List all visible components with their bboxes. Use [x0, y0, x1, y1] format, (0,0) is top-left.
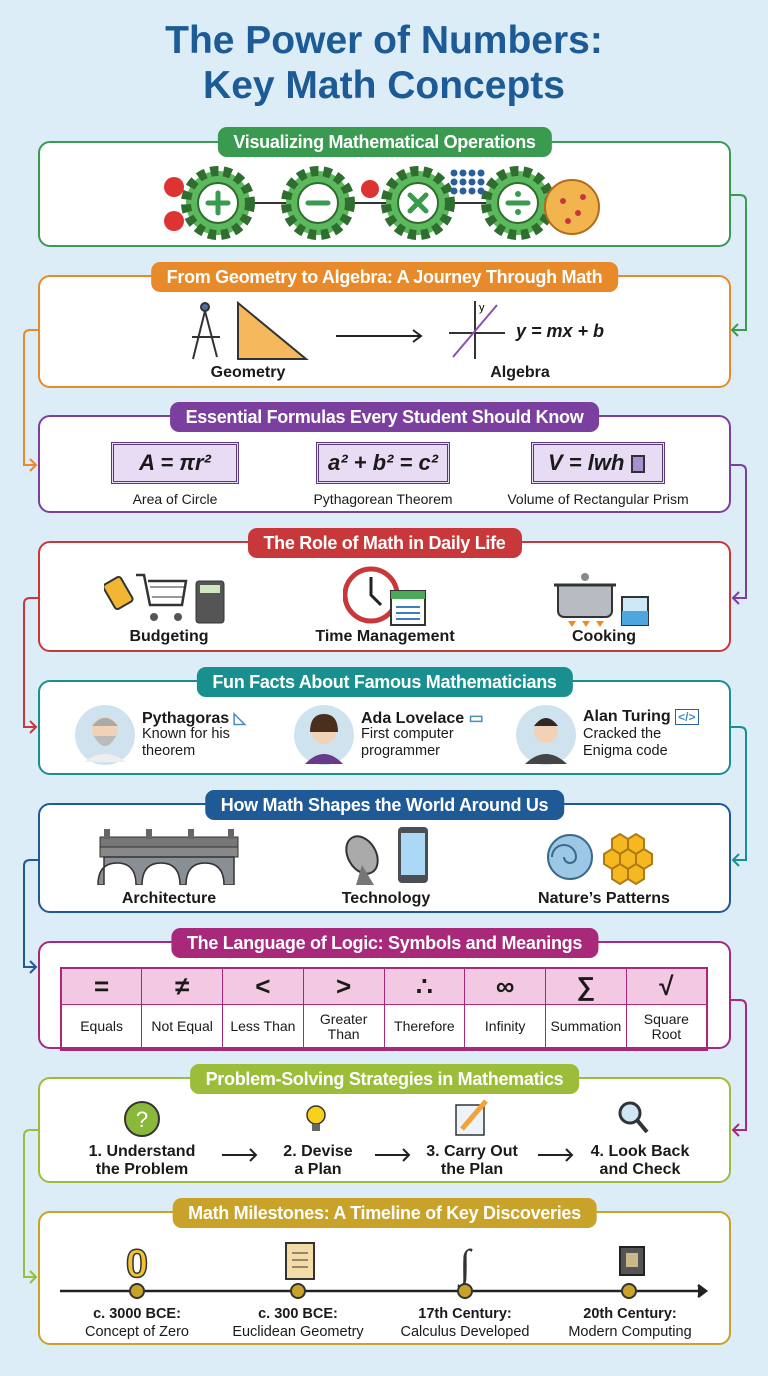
formula: circle: A = πr²: [139, 450, 211, 475]
symbol table: Summation: [550, 1018, 621, 1034]
symbol table: [60, 967, 708, 1051]
title: Key Math Concepts: [203, 64, 565, 107]
title: The Power of Numbers:: [165, 19, 603, 62]
panel: problem solving: [38, 1077, 731, 1183]
symbol table: Root: [652, 1026, 681, 1042]
formula: volume: V = lwh: [548, 450, 624, 475]
heading: operations: [217, 127, 552, 157]
panel: geometry to algebra: y = mx + b: [516, 321, 604, 341]
mathematician: Alan Turing: [516, 705, 699, 765]
timeline line: ∫: [457, 1241, 474, 1288]
panel: timeline: Euclidean Geometry: [232, 1324, 364, 1340]
heading: problem solving: Problem-Solving Strategies in Mathematics: [206, 1069, 563, 1089]
formula: circle: [111, 442, 239, 484]
mathematician: Alan Turing: Cracked the: [583, 726, 661, 742]
formula: pythagorean: [316, 442, 450, 484]
symbol table: ≠: [175, 971, 189, 1001]
heading: formulas: [170, 402, 599, 432]
heading: geometry: [151, 262, 618, 292]
mathematician: Pythagoras: Pythagoras ◺: [142, 710, 246, 727]
steps: the Problem: [96, 1161, 188, 1178]
panel: world: Technology: [342, 890, 430, 907]
symbol table: Greater: [320, 1011, 367, 1027]
panel: problem solving: 3. Carry Out: [426, 1143, 518, 1160]
heading: timeline: [172, 1198, 597, 1228]
panel: formulas: Volume of Rectangular Prism: [507, 491, 689, 507]
mathematician: Alan Turing: Alan Turing </>: [583, 708, 696, 725]
panel: formulas: Pythagorean Theorem: [313, 491, 453, 507]
heading: logic: [171, 928, 598, 958]
mathematician: Alan Turing: Enigma code: [583, 743, 668, 759]
heading: world: How Math Shapes the World Around Us: [221, 795, 548, 815]
steps: 1. Understand: [89, 1143, 195, 1160]
icon: nature: [547, 832, 653, 886]
symbol table: ∴: [416, 971, 433, 1001]
symbol table: Square: [644, 1011, 689, 1027]
mathematician: Ada Lovelace: First computer: [361, 726, 454, 742]
formula: pythagorean: a² + b² = c²: [328, 450, 438, 475]
symbol table: =: [94, 971, 109, 1001]
step icons: [124, 1099, 648, 1137]
symbol table: Not Equal: [151, 1018, 213, 1034]
formula: volume: [531, 442, 665, 484]
mathematician: Ada Lovelace: [294, 705, 484, 765]
heading: formulas: Essential Formulas Every Student Should Know: [186, 407, 583, 427]
panel: formulas: Area of Circle: [133, 491, 217, 507]
panel: world: [38, 803, 731, 913]
step icons: ?: [136, 1107, 148, 1132]
heading: problem solving: [190, 1064, 579, 1094]
timeline line: [60, 1241, 708, 1299]
labels: Architecture: [122, 890, 216, 907]
symbol table: >: [336, 971, 351, 1001]
heading: logic: The Language of Logic: Symbols and Meanings: [187, 933, 582, 953]
mathematician: Pythagoras: theorem: [142, 743, 195, 759]
symbol table: Less Than: [230, 1018, 295, 1034]
icon: budgeting: [104, 574, 224, 624]
panel: formulas: [38, 415, 731, 513]
heading: daily life: [247, 528, 522, 558]
panel: daily life: Cooking: [572, 628, 636, 645]
panel: timeline: [38, 1211, 731, 1345]
arrows: [222, 1148, 574, 1162]
milestones: c. 3000 BCE:: [93, 1306, 181, 1322]
panel: timeline: 17th Century:: [418, 1306, 512, 1322]
mathematician: Pythagoras: [75, 705, 246, 765]
heading: timeline: Math Milestones: A Timeline of Key Discoveries: [188, 1203, 581, 1223]
icon: compass and triangle: [192, 301, 309, 360]
symbol table: √: [659, 971, 674, 1001]
panel: timeline: Modern Computing: [568, 1324, 692, 1340]
icon: graph and equation: [449, 301, 505, 359]
symbol table: <: [255, 971, 270, 1001]
symbol table: Therefore: [394, 1018, 455, 1034]
panel: timeline: 20th Century:: [583, 1306, 677, 1322]
panel: problem solving: a Plan: [294, 1161, 342, 1178]
panel: geometry to algebra: [38, 275, 731, 388]
heading: mathematicians: Fun Facts About Famous Mathematicians: [212, 672, 557, 692]
panel: logic symbols: [38, 941, 731, 1049]
labels: Budgeting: [129, 628, 209, 645]
panel: daily life: [38, 541, 731, 652]
operations gears row: [164, 166, 600, 240]
icon: cooking: [554, 573, 649, 627]
panel: world: Nature’s Patterns: [538, 890, 670, 907]
panel: problem solving: the Plan: [441, 1161, 503, 1178]
symbol table: ∞: [496, 971, 514, 1001]
milestones: Concept of Zero: [85, 1324, 189, 1340]
symbol table: ∑: [577, 971, 595, 1001]
heading: operations: Visualizing Mathematical Operations: [233, 132, 536, 152]
icon: graph and equation: y: [479, 302, 485, 314]
timeline line: 0: [126, 1242, 148, 1286]
panel: timeline: c. 300 BCE:: [258, 1306, 338, 1322]
icon: time management: [343, 566, 426, 626]
symbol table: Infinity: [485, 1018, 525, 1034]
icon: bridge: [97, 829, 238, 885]
mathematician: Ada Lovelace: programmer: [361, 743, 440, 759]
labels: Geometry: [211, 364, 285, 381]
panel: timeline: Calculus Developed: [401, 1324, 529, 1340]
icon: technology: [345, 827, 428, 885]
panel: daily life: Time Management: [315, 628, 455, 645]
title: [165, 19, 603, 107]
panel: problem solving: and Check: [600, 1161, 680, 1178]
panel: mathematicians: [38, 680, 731, 775]
panel: operations: [38, 141, 731, 247]
panel: geometry to algebra: Algebra: [490, 364, 550, 381]
heading: daily life: The Role of Math in Daily Life: [263, 533, 506, 553]
heading: world: [205, 790, 564, 820]
heading: mathematicians: [196, 667, 573, 697]
arrow: [336, 329, 422, 343]
heading: geometry: From Geometry to Algebra: A Journey Through Math: [167, 267, 602, 287]
mathematician: Pythagoras: Known for his: [142, 726, 230, 742]
symbol table: Equals: [80, 1018, 123, 1034]
panel: problem solving: 4. Look Back: [591, 1143, 689, 1160]
panel: problem solving: 2. Devise: [283, 1143, 353, 1160]
steps: [89, 1143, 195, 1178]
milestones: [85, 1306, 189, 1340]
mathematician: Ada Lovelace: Ada Lovelace ▭: [361, 710, 484, 727]
symbol table: Than: [328, 1026, 360, 1042]
